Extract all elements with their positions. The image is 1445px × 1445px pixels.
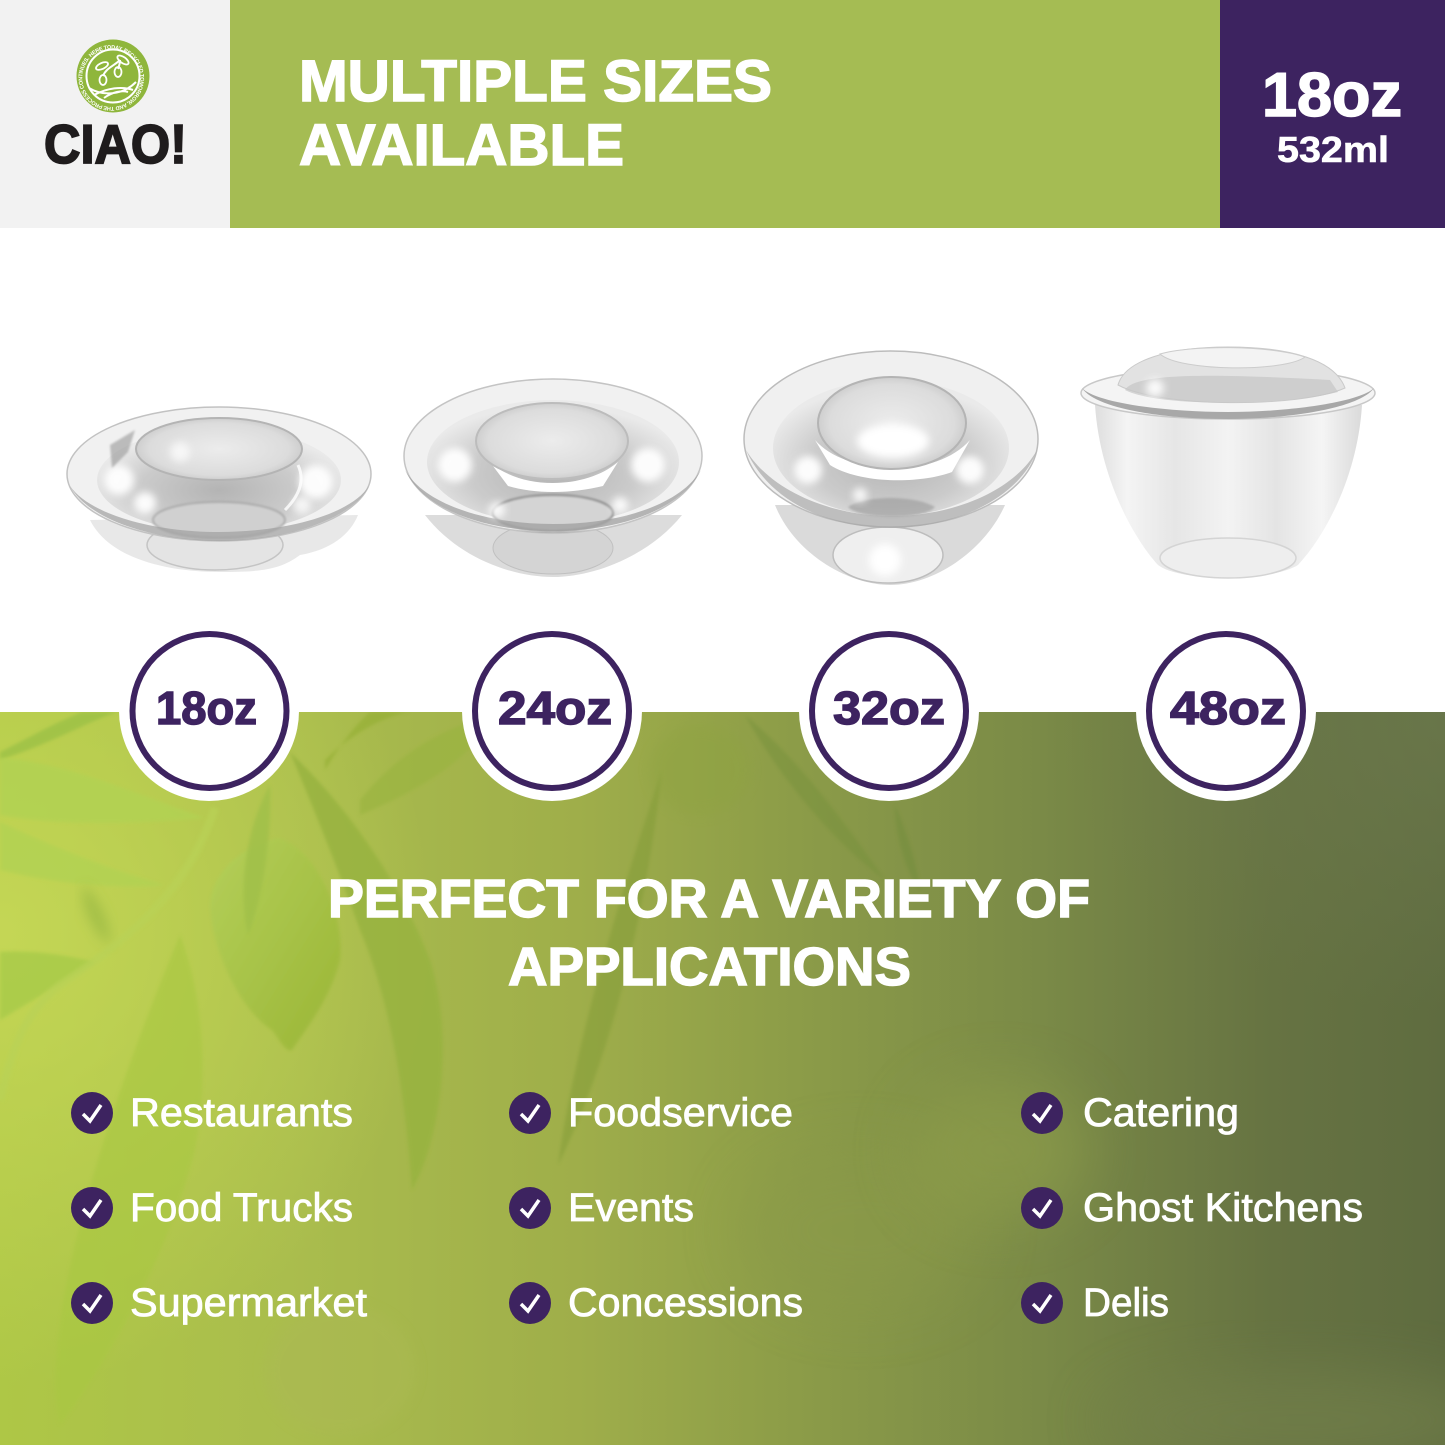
- heading: multiple sizes available: AVAILABLE: [299, 113, 624, 178]
- item: Events: [509, 1186, 694, 1230]
- heading: perfect for a variety of applications: APPLICATIONS: [508, 937, 911, 997]
- size badge: 18oz: [119, 621, 299, 801]
- logo wordmark: CIAO!: [44, 113, 187, 175]
- item: Delis: Delis: [1083, 1281, 1169, 1325]
- heading: perfect for a variety of applications: PERFECT FOR A VARIETY OF: [328, 869, 1090, 929]
- product: 48oz tall bowl: [1081, 347, 1375, 578]
- size badge panel: [1220, 0, 1445, 228]
- heading: perfect for a variety of applications: [328, 869, 1090, 997]
- item: Catering: [1021, 1091, 1239, 1135]
- size badge: 24oz: [462, 621, 642, 801]
- item: Foodservice: Foodservice: [568, 1091, 793, 1135]
- size badge panel: 18oz: [1262, 61, 1402, 130]
- item: Catering: Catering: [1083, 1091, 1239, 1135]
- item: Ghost Kitchens: Ghost Kitchens: [1083, 1186, 1363, 1230]
- logo badge: olive seal: HERE TODAY, RECYCLED TOMORROW, AND THE PROCESS CONTINUES.: [78, 45, 144, 111]
- application list: [71, 1091, 1363, 1325]
- size badge: 32oz: [799, 621, 979, 801]
- size badge: 18oz: 18oz: [156, 682, 257, 734]
- header band: [230, 0, 1220, 228]
- item: Restaurants: Restaurants: [130, 1091, 353, 1135]
- product: 32oz bowl: [744, 351, 1038, 585]
- product: 24oz bowl: [404, 379, 702, 577]
- background: blurred olive photo panel: [0, 712, 1445, 1445]
- heading: multiple sizes available: MULTIPLE SIZES: [299, 49, 772, 114]
- item: Delis: [1021, 1281, 1169, 1325]
- size badge: 48oz: 48oz: [1170, 682, 1286, 734]
- item: Events: Events: [568, 1186, 694, 1230]
- item: Food Trucks: Food Trucks: [130, 1186, 353, 1230]
- size badge: 48oz: [1136, 621, 1316, 801]
- size badge: 32oz: 32oz: [833, 682, 945, 734]
- item: Concessions: Concessions: [568, 1281, 803, 1325]
- item: Supermarket: Supermarket: [130, 1281, 367, 1325]
- logo panel: [0, 0, 230, 228]
- size badge panel: 532ml: [1277, 129, 1389, 170]
- product: 18oz bowl: [67, 407, 371, 572]
- heading: multiple sizes available: [299, 49, 772, 178]
- size badge: 24oz: 24oz: [498, 682, 612, 734]
